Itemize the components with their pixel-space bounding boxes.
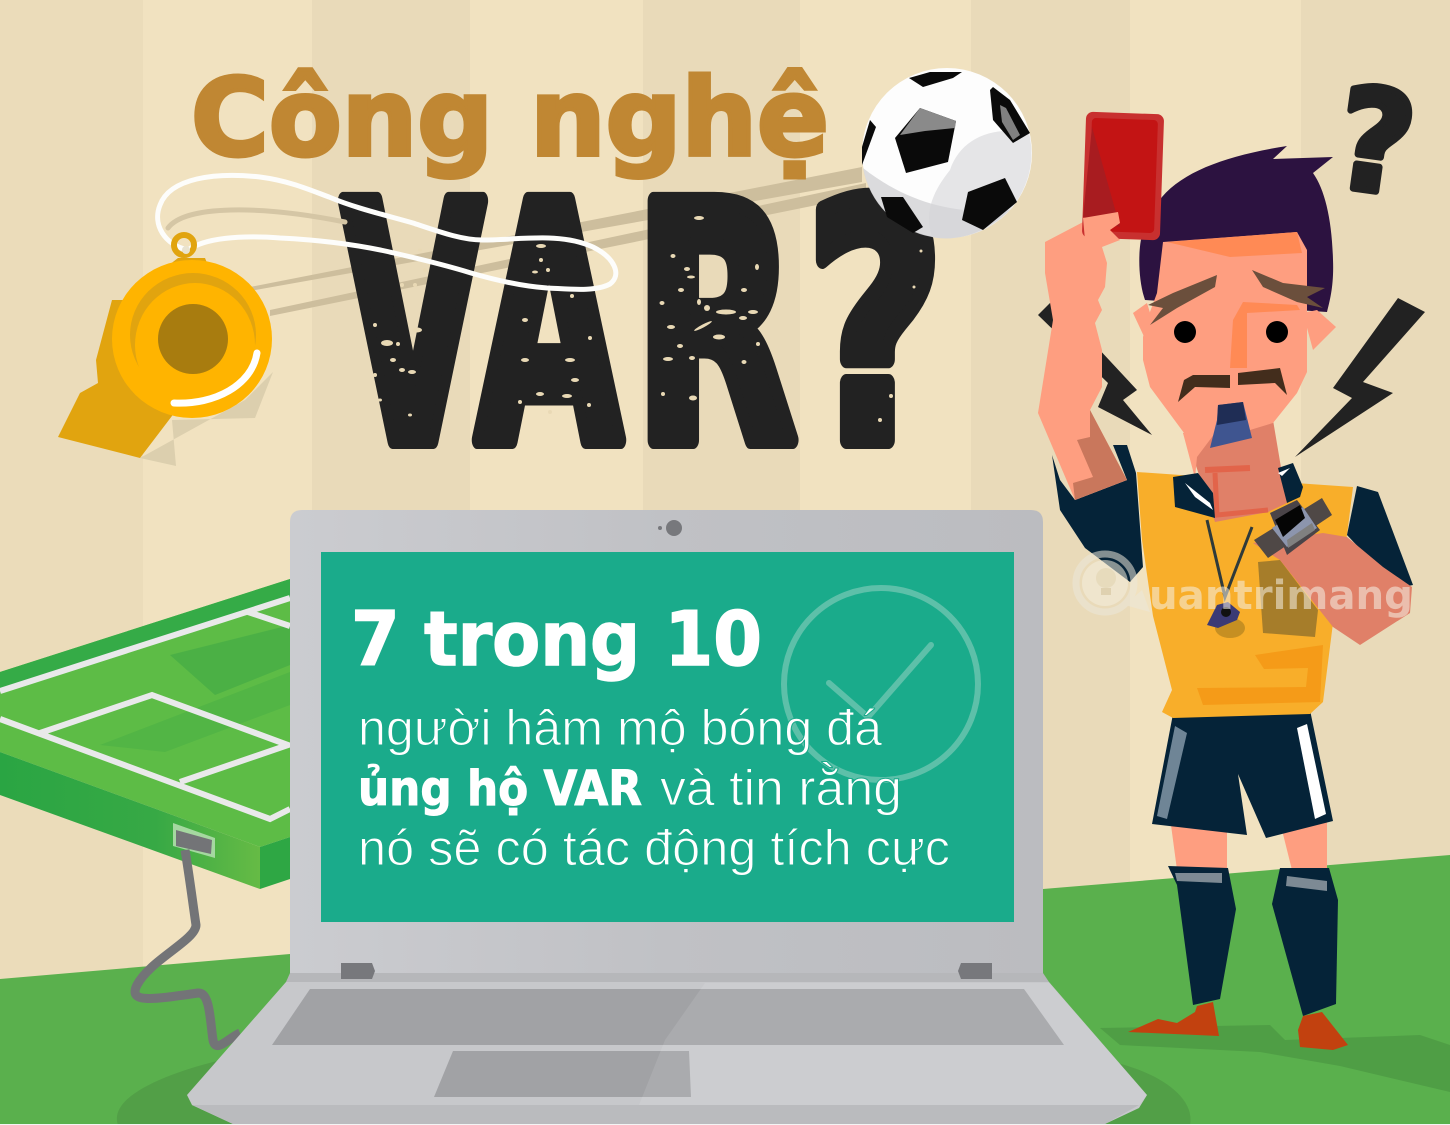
question mark: ? xyxy=(1326,57,1424,229)
body text: người hâm mộ bóng đá xyxy=(358,700,882,756)
referee ears xyxy=(1133,303,1336,350)
laptop base xyxy=(187,982,1147,1124)
referee sleeves xyxy=(1052,445,1143,582)
watermark: Quantrimang xyxy=(1076,554,1413,619)
watermark: Quantrimang: uantrimang xyxy=(1149,573,1413,619)
pitch connector and cable xyxy=(135,823,240,1046)
laptop hinges xyxy=(341,963,992,979)
referee shoes xyxy=(1128,1002,1348,1050)
laptop xyxy=(187,510,1147,1124)
icon: football xyxy=(862,68,1032,238)
icon: red card xyxy=(1082,112,1164,246)
title: VAR?: R xyxy=(634,137,797,518)
referee shirt xyxy=(1137,472,1353,718)
headline: 7 trong 10: 7 trong 10 xyxy=(351,595,762,683)
title: VAR? xyxy=(342,137,944,518)
laptop screen xyxy=(321,552,1014,922)
body text: nó sẽ có tác động tích cực xyxy=(358,820,950,876)
laptop keyboard xyxy=(272,989,1064,1045)
whistle cord xyxy=(158,175,616,289)
referee face xyxy=(1143,232,1307,437)
icon: whistle xyxy=(58,235,273,466)
title: VAR?: ? xyxy=(806,137,944,518)
referee lanyard and small whistle xyxy=(1207,520,1252,638)
referee socks xyxy=(1168,866,1338,1016)
title: VAR?: A xyxy=(476,137,623,518)
title: VAR?: V xyxy=(342,137,485,518)
referee hair xyxy=(1139,146,1333,312)
body text: ủng hộ VAR xyxy=(358,761,642,817)
laptop lid xyxy=(290,510,1043,980)
ground: green grass xyxy=(0,855,1450,1125)
referee legs xyxy=(1171,820,1327,870)
referee eyebrows xyxy=(1148,270,1325,325)
laptop touchpad xyxy=(434,1051,691,1097)
referee raised arm xyxy=(1038,213,1127,500)
lightning bolts xyxy=(1038,298,1425,457)
icon: wrist watch xyxy=(1254,498,1332,558)
referee forearm xyxy=(1253,533,1412,645)
referee collar xyxy=(1173,473,1215,518)
letter speckle texture xyxy=(373,216,922,422)
title: Công nghệ: Công nghệ xyxy=(191,57,829,181)
body text: và tin rằng xyxy=(660,760,902,816)
referee eyes xyxy=(1174,321,1288,343)
referee moustache xyxy=(1178,368,1287,402)
referee shorts xyxy=(1152,710,1333,838)
referee whistle in mouth xyxy=(1210,402,1252,448)
icon: check mark circle xyxy=(784,588,978,780)
motion trails behind title xyxy=(250,167,866,316)
laptop webcam xyxy=(658,520,682,536)
body text xyxy=(358,700,950,876)
referee xyxy=(1038,146,1413,1050)
football pitch board xyxy=(0,579,290,889)
referee neck xyxy=(1183,420,1287,522)
